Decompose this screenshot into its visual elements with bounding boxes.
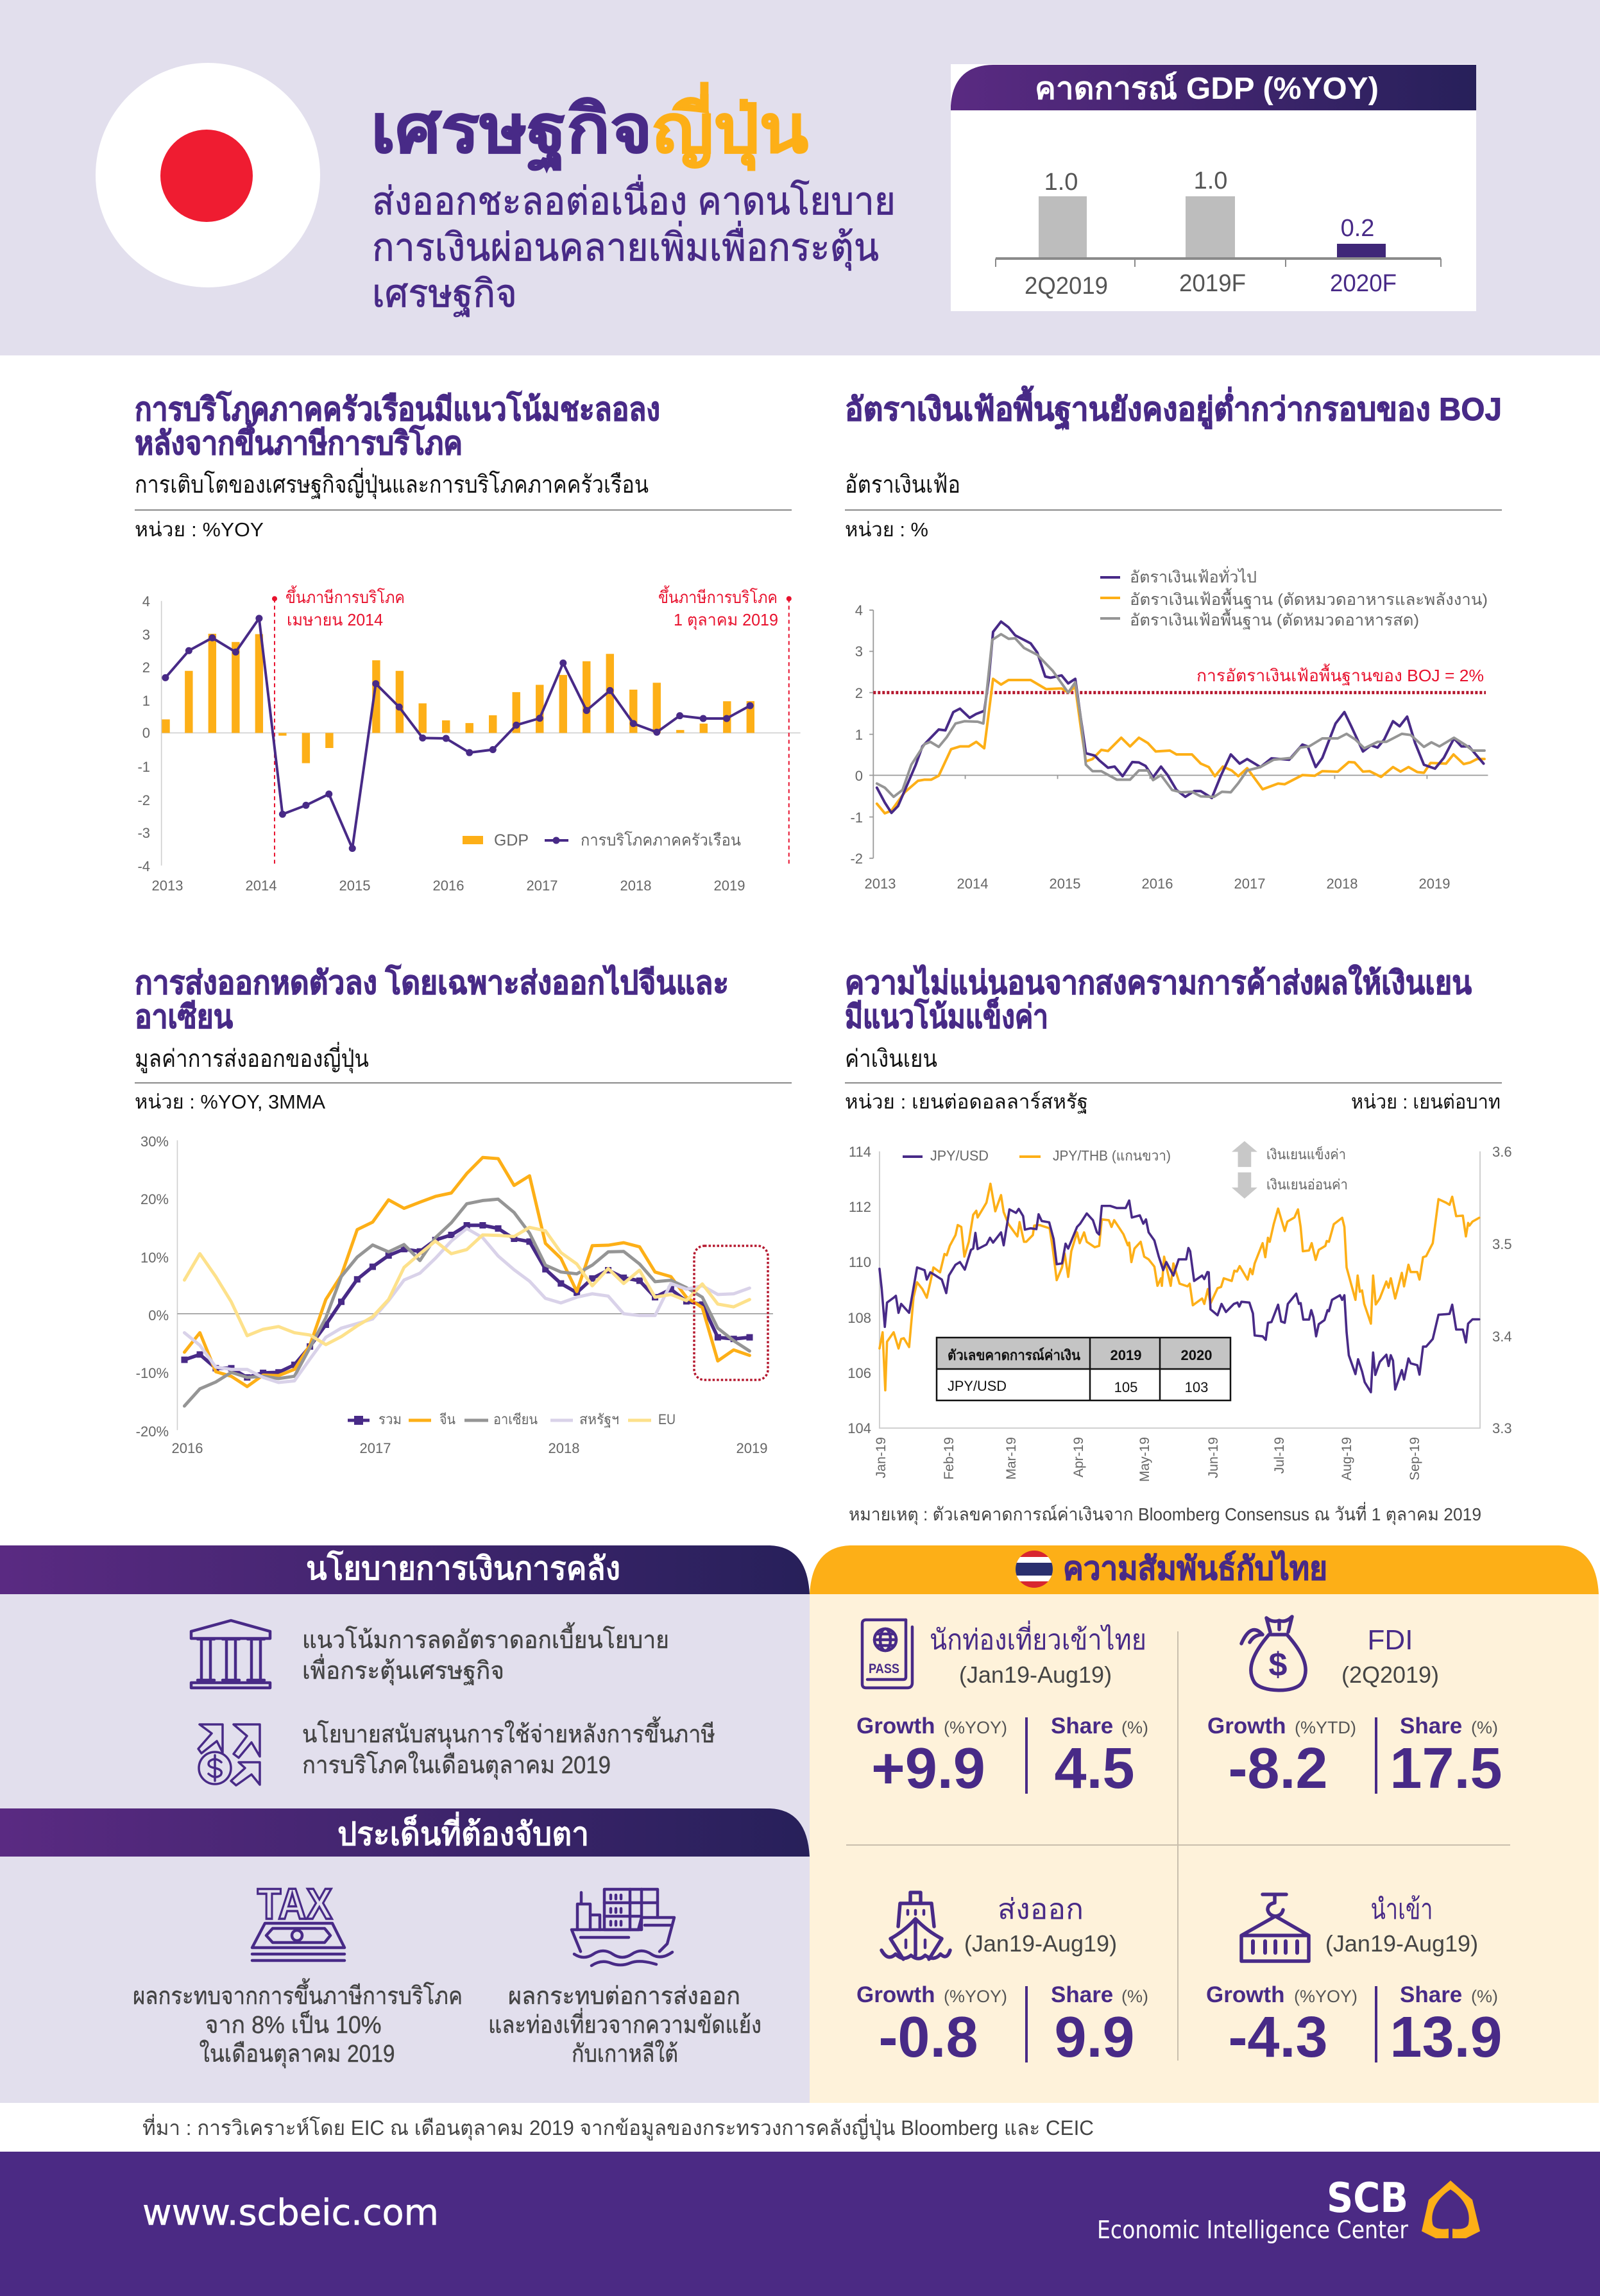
forecast table: 105 (1114, 1379, 1137, 1395)
icon: SCB logo (1422, 2181, 1480, 2238)
chart: exports by destination: 2019 (736, 1440, 767, 1456)
stat: exports: Share (1051, 1982, 1113, 2007)
stat: exports: (Jan19-Aug19) (964, 1930, 1117, 1957)
stat: exports: ส่งออก (998, 1894, 1084, 1925)
arrow labels: เงินเยนอ่อนค่า (1266, 1177, 1348, 1193)
stat: tourists: (%) (1121, 1718, 1148, 1737)
GDP bar chart: 0.2 (1341, 215, 1374, 242)
policy item: rate cut: เพื่อกระตุ้นเศรษฐกิจ (302, 1654, 504, 1685)
unit label left: หน่วย : เยนต่อดอลลาร์สหรัฐ (845, 1091, 1088, 1114)
chart subtitle: inflation: อัตราเงินเฟ้อ (845, 472, 960, 498)
chart: GDP and household consumption: 2013 (152, 878, 183, 894)
chart legend: GDP (494, 831, 529, 849)
annotation: BOJ target: การอัตราเงินเฟ้อพื้นฐานของ BOJ = 2% (1196, 663, 1484, 686)
chart: yen exchange rates: 104 (847, 1420, 871, 1436)
chart: inflation: -2 (850, 851, 863, 867)
stat: FDI (1207, 1617, 1502, 1801)
subtitle: การเงินผ่อนคลายเพิ่มเพื่อกระตุ้น (372, 221, 879, 271)
chart: exports by destination: 2016 (172, 1440, 203, 1456)
watch item: tax impact: จาก 8% เป็น 10% (205, 2010, 381, 2039)
chart subtitle: export value: มูลค่าการส่งออกของญี่ปุ่น (135, 1042, 369, 1073)
stat: tourists (856, 1620, 1148, 1801)
chart: GDP and household consumption: 2016 (433, 878, 464, 894)
chart: exports by destination: 30% (140, 1134, 169, 1150)
subtitle (372, 174, 896, 317)
chart: GDP and household consumption: -1 (137, 759, 150, 775)
stat: FDI: (2Q2019) (1341, 1662, 1439, 1688)
stat: imports: (%) (1471, 1987, 1498, 2006)
chart: yen exchange rates: Jan-19 (874, 1437, 889, 1478)
icon: passport: PASS (869, 1662, 899, 1676)
watch item: tax impact: ผลกระทบจากการขึ้นภาษีการบริโภค (133, 1978, 463, 2010)
GDP bar chart: 2020F (1330, 270, 1397, 297)
subtitle: เศรษฐกิจ (372, 272, 517, 317)
chart: inflation: 0 (855, 768, 863, 784)
annotation: tax hike 2019: 1 ตุลาคม 2019 (674, 610, 778, 630)
watch item: tax impact (133, 1978, 463, 2068)
panel: relations with Thailand (810, 1545, 1599, 2103)
chart: yen exchange rates: Mar-19 (1004, 1437, 1019, 1480)
panel: watch points (0, 1808, 810, 2068)
chart: yen exchange rates: 110 (849, 1254, 871, 1270)
heading: yen: ความไม่แน่นอนจากสงครามการค้าส่งผลให้เงินเยน (845, 964, 1472, 1001)
heading: yen: มีแนวโน้มแข็งค่า (845, 997, 1048, 1035)
GDP bar chart (996, 167, 1441, 300)
icon: tax (252, 1880, 345, 1960)
chart: inflation: 3 (855, 643, 863, 659)
stat: exports: (%YOY) (944, 1987, 1007, 2006)
chart: exports by destination: -10% (136, 1365, 169, 1381)
stat: imports: (Jan19-Aug19) (1325, 1930, 1478, 1957)
chart: exports by destination: 20% (140, 1191, 169, 1207)
chart subtitle: growth: การเติบโตของเศรษฐกิจญี่ปุ่นและการบริโภคภาคครัวเรือน (135, 468, 649, 499)
watch heading: ประเด็นที่ต้องจับตา (337, 1812, 589, 1852)
icon: Thai flag (1016, 1551, 1053, 1588)
chart: yen exchange rates: 3.3 (1492, 1420, 1512, 1436)
chart: yen exchange rates: Jun-19 (1206, 1437, 1221, 1478)
chart: inflation: -1 (850, 810, 863, 826)
stat: exports: 9.9 (1054, 2005, 1135, 2070)
heading: exports: อาเซียน (135, 999, 233, 1035)
watch item: export impact: ผลกระทบต่อการส่งออก (508, 1983, 740, 2010)
watch item: export impact: กับเกาหลีใต้ (572, 2040, 678, 2068)
chart legend (903, 1148, 1171, 1164)
icon: Japan flag (96, 63, 320, 287)
arrow labels: เงินเยนแข็งค่า (1266, 1145, 1346, 1162)
forecast table: ตัวเลขคาดการณ์ค่าเงิน (948, 1347, 1080, 1363)
stat: imports: 13.9 (1390, 2005, 1502, 2070)
policy item: rate cut: แนวโน้มการลดอัตราดอกเบี้ยนโยบาย (302, 1622, 669, 1654)
panel: GDP forecast (951, 64, 1476, 311)
footer band (0, 2152, 1600, 2296)
chart legend: JPY/THB (แกนขวา) (1053, 1148, 1171, 1164)
chart: inflation: 2013 (865, 876, 896, 892)
icon: ship front (881, 1892, 950, 1959)
chart legend: JPY/USD (930, 1148, 989, 1164)
chart: GDP and household consumption: 3 (142, 627, 150, 643)
chart: GDP and household consumption: 2018 (620, 878, 651, 894)
chart: inflation: 1 (855, 727, 863, 743)
forecast table: 2020 (1181, 1347, 1212, 1363)
GDP bar chart: 2019F (1179, 270, 1246, 297)
heading: core inflation: อัตราเงินเฟ้อพื้นฐานยังคงอยู่ต่ำกว่ากรอบของ BOJ (845, 386, 1502, 430)
chart legend: อาเซียน (493, 1411, 538, 1427)
icon: cargo ship (572, 1889, 674, 1966)
SCB wordmark: SCB (1327, 2175, 1408, 2222)
annotation: tax hike 2019: ขึ้นภาษีการบริโภค (658, 585, 778, 607)
stat: FDI: FDI (1368, 1624, 1413, 1656)
chart: yen exchange rates: Jul-19 (1272, 1437, 1287, 1474)
chart: inflation: 2018 (1327, 876, 1357, 892)
unit label: หน่วย : %YOY (135, 518, 264, 541)
forecast table: JPY/USD (948, 1378, 1007, 1394)
icon: tax: TAX (257, 1880, 332, 1928)
chart: GDP and household consumption: 2017 (527, 878, 557, 894)
chart legend: EU (658, 1411, 676, 1427)
chart: exports by destination: 2017 (360, 1440, 391, 1456)
chart: GDP and household consumption: 0 (142, 725, 150, 741)
stat: imports: นำเข้า (1370, 1894, 1433, 1925)
chart: yen exchange rates (847, 1141, 1512, 1482)
stat: exports (856, 1892, 1148, 2070)
chart: yen exchange rates: 106 (847, 1365, 871, 1381)
Thailand heading: ความสัมพันธ์กับไทย (1063, 1550, 1327, 1586)
stat: FDI: (%YTD) (1295, 1718, 1356, 1737)
watch item: export impact: และท่องเที่ยวจากความขัดแย้ง (488, 2008, 762, 2039)
unit label: หน่วย : %YOY, 3MMA (135, 1091, 325, 1113)
watch item: tax impact: ในเดือนตุลาคม 2019 (199, 2040, 395, 2068)
chart: yen exchange rates: 3.6 (1492, 1144, 1512, 1160)
chart: yen exchange rates: Aug-19 (1340, 1437, 1354, 1481)
chart: yen exchange rates: 112 (849, 1199, 871, 1215)
chart legend: อัตราเงินเฟ้อทั่วไป (1130, 566, 1257, 586)
chart: inflation: 2016 (1142, 876, 1173, 892)
chart legend: จีน (439, 1411, 455, 1427)
chart: yen exchange rates: Feb-19 (942, 1437, 957, 1480)
stat: exports: Growth (856, 1982, 935, 2007)
arrow labels (1266, 1145, 1348, 1193)
stat: FDI: Share (1400, 1713, 1462, 1739)
SCB wordmark (1097, 2175, 1408, 2244)
policy item: spending support: นโยบายสนับสนุนการใช้จ่ายหลังการขึ้นภาษี (302, 1716, 715, 1749)
stat: FDI: (%) (1471, 1718, 1498, 1737)
policy heading: นโยบายการเงินการคลัง (306, 1549, 620, 1586)
forecast table (937, 1338, 1230, 1400)
chart: GDP and household consumption: -4 (137, 858, 150, 874)
chart legend: รวม (379, 1411, 402, 1427)
stat: imports: Growth (1206, 1982, 1284, 2007)
chart: yen exchange rates: May-19 (1137, 1437, 1152, 1482)
SCB wordmark: Economic Intelligence Center (1097, 2216, 1408, 2244)
chart legend (1100, 566, 1488, 629)
chart: inflation: 2017 (1234, 876, 1265, 892)
chart: exports by destination: 10% (140, 1250, 169, 1266)
stat: imports: (%YOY) (1294, 1987, 1357, 2006)
annotation: tax hike 2014: ขึ้นภาษีการบริโภค (285, 585, 405, 607)
chart: exports by destination: 0% (148, 1307, 169, 1323)
watch item: export impact (488, 1983, 762, 2068)
icon: container (1241, 1894, 1309, 1961)
stat: tourists: (Jan19-Aug19) (959, 1662, 1112, 1688)
annotation: tax hike 2019 (658, 585, 778, 630)
chart legend: อัตราเงินเฟ้อพื้นฐาน (ตัดหมวดอาหารและพลังงาน) (1130, 588, 1488, 609)
stat: tourists: (%YOY) (944, 1718, 1007, 1737)
heading: household consumption: การบริโภคภาคครัวเรือนมีแนวโน้มชะลอลง (135, 390, 660, 427)
chart subtitle: yen value: ค่าเงินเยน (845, 1046, 937, 1073)
chart: exports by destination: 2018 (549, 1440, 579, 1456)
icon: money bag: $ (1269, 1646, 1288, 1683)
chart: inflation: 2015 (1050, 876, 1080, 892)
heading: yen (845, 964, 1472, 1035)
stat: FDI: 17.5 (1390, 1737, 1502, 1801)
source note: ที่มา : การวิเคราะห์โดย EIC ณ เดือนตุลาคม 2019 จากข้อมูลของกระทรวงการคลังญี่ปุ่น Bloomberg และ CEIC (142, 2114, 1094, 2141)
footnote: หมายเหตุ : ตัวเลขคาดการณ์ค่าเงินจาก Bloomberg Consensus ณ วันที่ 1 ตุลาคม 2019 (849, 1502, 1481, 1526)
subtitle: ส่งออกชะลอต่อเนื่อง คาดนโยบาย (372, 174, 896, 223)
GDP bar chart: 1.0 (1194, 167, 1227, 194)
chart: yen exchange rates: 108 (847, 1310, 871, 1326)
stat: tourists: 4.5 (1054, 1737, 1135, 1801)
icon: money bag (1241, 1617, 1306, 1690)
main title: เศรษฐกิจ ญี่ปุ่น (371, 82, 808, 173)
chart: inflation: 2 (855, 685, 863, 701)
stat: imports (1206, 1894, 1502, 2070)
chart: GDP and household consumption: -3 (137, 825, 150, 841)
chart: GDP and household consumption: 2014 (246, 878, 277, 894)
icon: spending arrows (198, 1724, 260, 1785)
chart: yen exchange rates: 3.5 (1492, 1236, 1512, 1252)
website: www.scbeic.com (142, 2192, 439, 2234)
stat: imports: Share (1400, 1982, 1462, 2007)
chart: inflation: 2019 (1419, 876, 1450, 892)
icon: bank (191, 1620, 270, 1688)
chart: GDP and household consumption: -2 (137, 792, 150, 808)
annotation: tax hike 2014: เมษายน 2014 (287, 610, 383, 629)
policy item: rate cut (302, 1622, 669, 1685)
annotation: tax hike 2014 (285, 585, 405, 629)
forecast table: 103 (1185, 1379, 1208, 1395)
policy item: spending support (302, 1716, 715, 1780)
chart: yen exchange rates: 3.4 (1492, 1329, 1512, 1345)
highlight box: recent decline (694, 1246, 768, 1380)
chart: GDP and household consumption (137, 585, 801, 894)
stat: tourists: Share (1051, 1713, 1113, 1739)
stat: FDI: Growth (1207, 1713, 1286, 1739)
chart: GDP and household consumption: 2 (142, 659, 150, 676)
heading: exports (135, 964, 729, 1035)
chart: exports by destination: -20% (136, 1424, 169, 1440)
chart legend (348, 1411, 676, 1428)
stat: tourists: +9.9 (871, 1737, 985, 1801)
policy item: spending support: การบริโภคในเดือนตุลาคม 2019 (302, 1751, 611, 1780)
GDP bar chart: 1.0 (1044, 169, 1078, 196)
chart: GDP and household consumption: 2015 (339, 878, 370, 894)
stat: FDI: -8.2 (1228, 1737, 1328, 1801)
chart: GDP and household consumption: 1 (142, 693, 150, 709)
panel: policy (0, 1545, 810, 2103)
chart: GDP and household consumption: 2019 (714, 878, 745, 894)
chart legend: อัตราเงินเฟ้อพื้นฐาน (ตัดหมวดอาหารสด) (1130, 608, 1419, 629)
stat: exports: (%) (1121, 1987, 1148, 2006)
heading: household consumption: หลังจากขึ้นภาษีการบริโภค (135, 420, 463, 461)
header band background (0, 0, 1600, 355)
stat: imports: -4.3 (1228, 2005, 1328, 2070)
chart legend: การบริโภคภาคครัวเรือน (581, 831, 741, 849)
unit label: หน่วย : % (845, 518, 928, 541)
heading: household consumption (135, 390, 660, 461)
heading: exports: การส่งออกหดตัวลง โดยเฉพาะส่งออกไปจีนและ (135, 964, 729, 1001)
icon: passport (862, 1620, 912, 1688)
chart: yen exchange rates: Apr-19 (1071, 1437, 1086, 1477)
chart legend (463, 831, 741, 849)
forecast table: 2019 (1111, 1347, 1141, 1363)
GDP bar chart: 2Q2019 (1025, 273, 1108, 300)
unit label right: หน่วย : เยนต่อบาท (1351, 1091, 1501, 1113)
chart: inflation: 4 (855, 602, 863, 618)
stat: tourists: Growth (856, 1713, 935, 1739)
chart: inflation (850, 566, 1488, 892)
chart: exports by destination (136, 1134, 773, 1456)
stat: tourists: นักท่องเที่ยวเข้าไทย (930, 1620, 1146, 1656)
chart: yen exchange rates: Sep-19 (1408, 1437, 1422, 1481)
chart: inflation: 2014 (957, 876, 988, 892)
chart: yen exchange rates: 114 (849, 1144, 871, 1160)
chart legend: สหรัฐฯ (579, 1411, 619, 1428)
GDP panel heading: คาดการณ์ GDP (%YOY) (1035, 71, 1379, 106)
stat: exports: -0.8 (878, 2005, 978, 2070)
chart: GDP and household consumption: 4 (142, 593, 150, 609)
